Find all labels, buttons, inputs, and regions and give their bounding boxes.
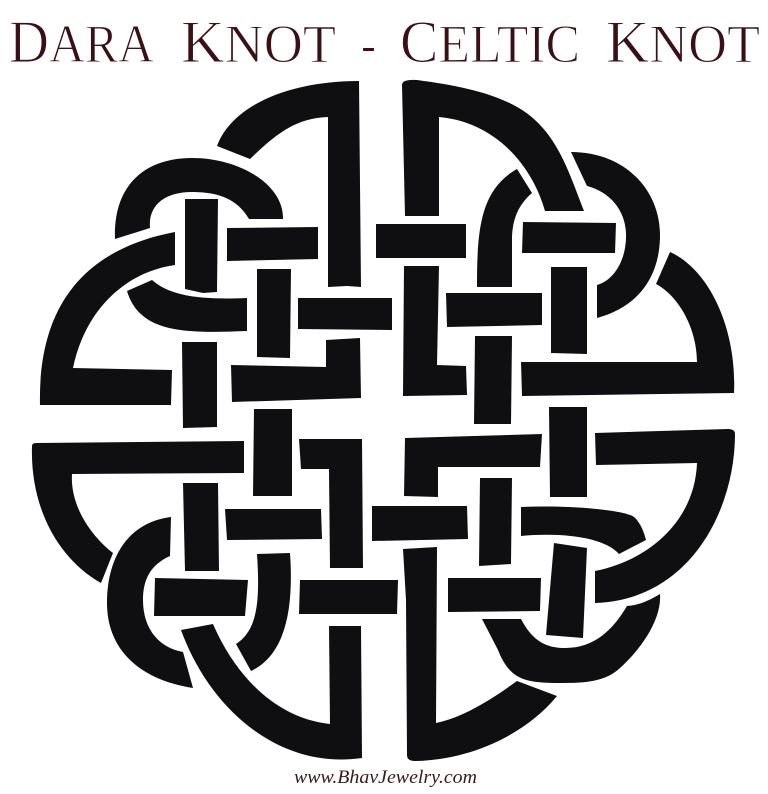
title word: Dara: DARA xyxy=(9,9,154,75)
title word: Celtic: CELTIC xyxy=(400,9,580,75)
celtic knot xyxy=(32,80,735,761)
strand: bottom-left arc xyxy=(181,624,362,760)
weave bar xyxy=(257,269,291,358)
title xyxy=(9,9,760,75)
weave bar xyxy=(299,580,398,614)
title word: Knot: KNOT xyxy=(181,9,336,75)
weave bar xyxy=(185,199,218,293)
weave bar xyxy=(551,267,587,354)
strand: lower-left loop xyxy=(107,517,193,688)
corner piece xyxy=(404,434,542,497)
weave bar xyxy=(479,478,512,566)
weave bar xyxy=(376,224,466,258)
strand: lower-right crescent xyxy=(521,507,646,554)
weave bar xyxy=(225,509,322,540)
weave bar xyxy=(253,409,292,496)
strand: bottom-centre arc xyxy=(403,547,557,761)
title dash: - xyxy=(361,14,376,74)
corner piece xyxy=(299,439,363,568)
weave bar xyxy=(182,342,217,428)
strand: upper-right loop xyxy=(571,152,660,318)
strand: lower-left curved bar xyxy=(236,553,291,671)
strand: top-right arc xyxy=(402,80,584,216)
weave bar xyxy=(546,543,587,638)
footer website: www.BhavJewelry.com xyxy=(294,767,477,788)
weave bar xyxy=(154,578,248,616)
weave bar xyxy=(474,336,512,424)
weave bar xyxy=(183,483,219,571)
corner piece xyxy=(231,338,361,402)
strand: lower-right arc xyxy=(595,429,735,603)
weave bar xyxy=(298,298,392,330)
strand: left crescent xyxy=(127,280,247,332)
corner piece xyxy=(403,266,467,396)
weave bar xyxy=(227,227,318,261)
weave bar xyxy=(448,578,541,612)
weave bar xyxy=(522,222,616,253)
strand: lower-right loop xyxy=(482,594,660,683)
strand: right arc xyxy=(521,252,734,396)
title word: Knot (second): KNOT xyxy=(606,9,760,75)
strand: lower-left arc xyxy=(32,441,244,583)
weave bar xyxy=(372,506,468,541)
weave bar xyxy=(549,407,587,497)
weave bar xyxy=(446,293,542,327)
strand: upper-left loop xyxy=(115,158,283,239)
strand: top-left arc xyxy=(217,81,361,287)
strand: left arc xyxy=(40,232,175,405)
strand: upper-right curved bar xyxy=(477,169,532,287)
